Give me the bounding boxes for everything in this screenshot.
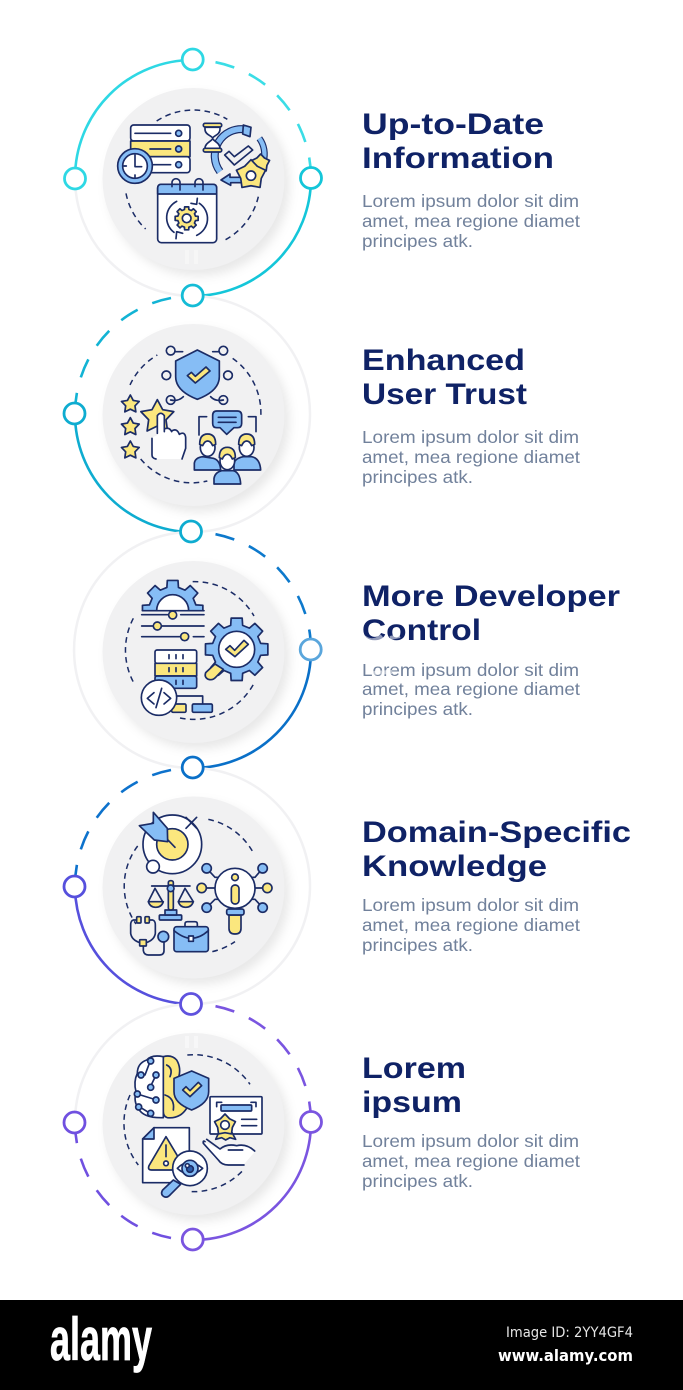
heading 2: Enhanced bbox=[362, 344, 525, 377]
heading 5: ipsum bbox=[362, 1086, 462, 1119]
body 2: amet, mea regione diamet bbox=[362, 447, 580, 467]
icon: shield, stars, hand, users bbox=[121, 346, 261, 484]
body 5: amet, mea regione diamet bbox=[362, 1151, 580, 1171]
heading 4: Domain-Specific bbox=[362, 816, 631, 849]
ring 5 bbox=[75, 1004, 311, 1240]
ring 4 bbox=[75, 768, 310, 1004]
body 5: Lorem ipsum dolor sit dim bbox=[362, 1131, 579, 1151]
icon: target, scales, info lens, stethoscope, briefcase bbox=[124, 812, 272, 955]
icon: brain, shield, certificate, warning document bbox=[124, 1055, 262, 1197]
heading 3: More Developer bbox=[362, 580, 620, 613]
body 1: principes atk. bbox=[362, 231, 473, 251]
disc 1 bbox=[102, 88, 284, 270]
body 4: principes atk. bbox=[362, 935, 473, 955]
body 2: principes atk. bbox=[362, 467, 473, 487]
image id: Image ID: 2YY4GF4 bbox=[506, 1325, 633, 1341]
disc 4 bbox=[102, 796, 284, 978]
ring 1 bbox=[75, 60, 311, 296]
panel: more developer control bbox=[74, 532, 620, 768]
ring 3 bbox=[74, 532, 311, 768]
body 1: Lorem ipsum dolor sit dim bbox=[362, 191, 579, 211]
website: www.alamy.com bbox=[498, 1346, 633, 1365]
body 2: Lorem ipsum dolor sit dim bbox=[362, 427, 579, 447]
icon: server, clock, hourglass, calendar bbox=[118, 110, 270, 243]
heading 1: Information bbox=[362, 142, 554, 175]
watermark traces bbox=[187, 250, 400, 1048]
heading 5: Lorem bbox=[362, 1052, 466, 1085]
heading 2: User Trust bbox=[362, 378, 527, 411]
body 5: principes atk. bbox=[362, 1171, 473, 1191]
disc 2 bbox=[102, 324, 284, 506]
heading 4: Knowledge bbox=[362, 850, 547, 883]
body 3: principes atk. bbox=[362, 699, 473, 719]
panel: domain-specific knowledge bbox=[75, 768, 631, 1004]
footer bar bbox=[0, 1300, 683, 1390]
body 4: Lorem ipsum dolor sit dim bbox=[362, 895, 579, 915]
body 3: amet, mea regione diamet bbox=[362, 679, 580, 699]
icon: gears, sliders, server, code bbox=[125, 580, 268, 719]
disc 5 bbox=[102, 1033, 284, 1215]
alamy logo: alamy bbox=[50, 1306, 152, 1373]
ring 2 bbox=[75, 296, 310, 532]
panel: lorem ipsum bbox=[75, 1004, 580, 1240]
panel: up-to-date information bbox=[75, 60, 580, 296]
heading 3: Control bbox=[362, 614, 481, 647]
disc 3 bbox=[102, 561, 284, 743]
connector nodes bbox=[64, 49, 322, 1250]
heading 1: Up-to-Date bbox=[362, 108, 544, 141]
panel: enhanced user trust bbox=[75, 296, 580, 532]
body 3: Lorem ipsum dolor sit dim bbox=[362, 660, 579, 680]
body 1: amet, mea regione diamet bbox=[362, 211, 580, 231]
body 4: amet, mea regione diamet bbox=[362, 915, 580, 935]
